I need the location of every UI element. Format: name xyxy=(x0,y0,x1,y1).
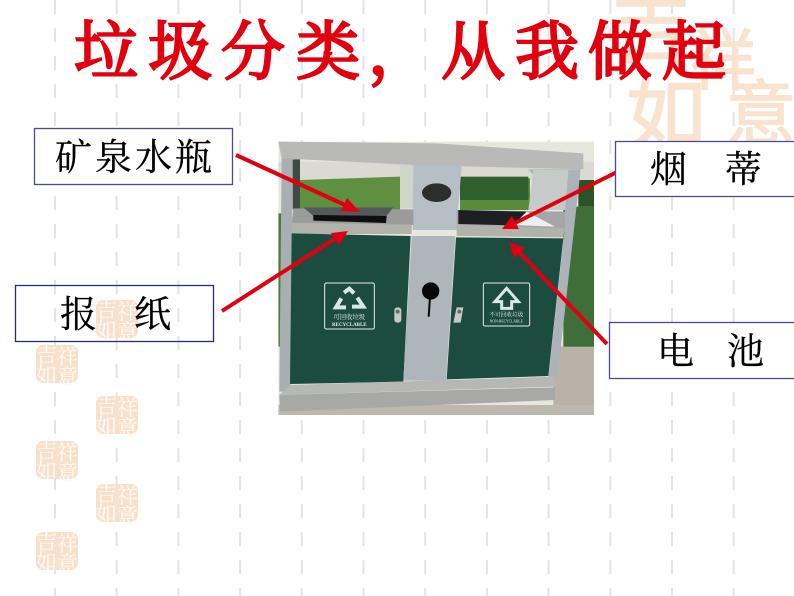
label: newspaper: 报纸 xyxy=(60,294,171,336)
sign: recyclable: 可回收垃圾 xyxy=(334,312,366,321)
sign: recyclable: RECYCLABLE xyxy=(332,323,367,328)
right door xyxy=(447,237,563,379)
watermark: large seal characters top right: 如 xyxy=(626,70,706,159)
sign: non-recyclable: NON-RECYCLABLE xyxy=(490,320,524,324)
sign: recyclable xyxy=(325,283,374,329)
title: 垃圾分类，从我做起 xyxy=(74,17,726,88)
label: cigarette butt: 烟蒂 xyxy=(650,149,762,191)
watermark: large seal characters top right: 意 xyxy=(726,75,794,153)
frame xyxy=(278,142,583,392)
sign: non-recyclable xyxy=(483,283,530,326)
label: battery xyxy=(610,322,794,378)
label: newspaper xyxy=(16,286,214,342)
watermark: large seal characters top right: 祥 xyxy=(690,24,756,98)
arrow to bottle xyxy=(236,155,360,212)
label: cigarette butt xyxy=(616,142,794,196)
label: battery: 电池 xyxy=(657,331,764,373)
base xyxy=(279,377,555,412)
arrow to cigarette xyxy=(502,172,617,229)
label: bottle: 矿泉水瓶 xyxy=(55,137,212,179)
arrow to newspaper xyxy=(222,231,348,311)
watermark: large seal characters top right xyxy=(612,0,794,159)
left door xyxy=(290,233,411,384)
photo: recycling bins xyxy=(278,142,594,415)
arrow to battery xyxy=(509,242,607,344)
label: bottle xyxy=(34,128,232,184)
seal stamps column xyxy=(36,298,138,576)
center pillar with slot xyxy=(403,236,455,381)
sign: non-recyclable: 不可回收垃圾 xyxy=(489,310,524,318)
door handles xyxy=(394,307,463,323)
